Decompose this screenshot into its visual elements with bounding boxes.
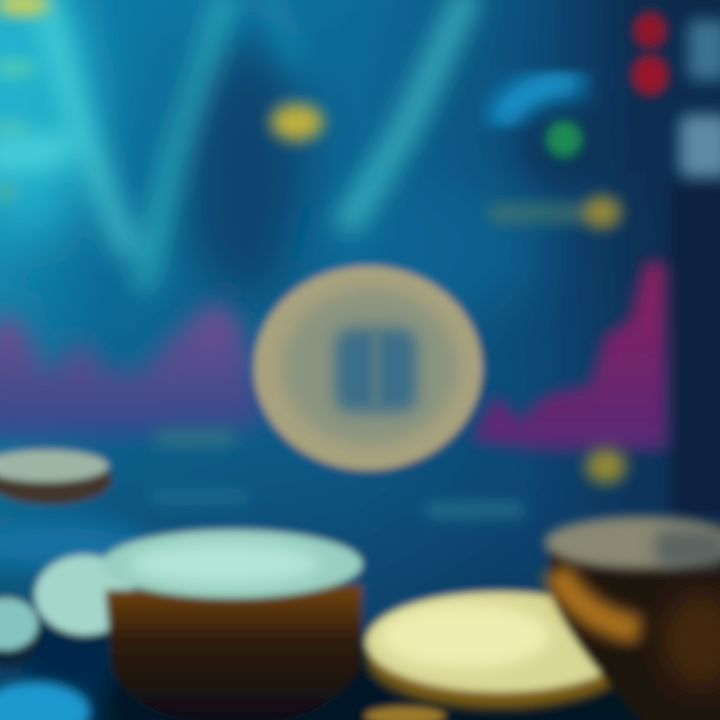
bottom-left cyan glow <box>0 682 90 720</box>
purple area chart left <box>0 300 265 440</box>
cyan swoosh <box>505 84 570 115</box>
left small coin <box>0 596 42 668</box>
green light <box>546 121 582 157</box>
faint labels beneath chart <box>150 430 525 518</box>
magenta area chart right <box>470 262 668 450</box>
lower dark band <box>100 640 720 720</box>
cyan chart streaks <box>0 0 465 280</box>
dark halo behind green light <box>517 103 613 187</box>
small yellow marker right <box>586 449 626 483</box>
olive label <box>488 196 621 228</box>
right text blocks <box>680 20 720 177</box>
left coin stack <box>35 530 362 720</box>
yellow marker <box>271 104 323 140</box>
left flat coin <box>0 450 112 504</box>
left faint labels <box>0 59 36 200</box>
top-left yellow glow <box>0 0 50 16</box>
red lights <box>632 12 668 95</box>
central golden coin <box>365 592 634 720</box>
central coin <box>254 266 482 470</box>
lower-left navy <box>15 610 125 690</box>
right coin stack <box>545 517 720 720</box>
